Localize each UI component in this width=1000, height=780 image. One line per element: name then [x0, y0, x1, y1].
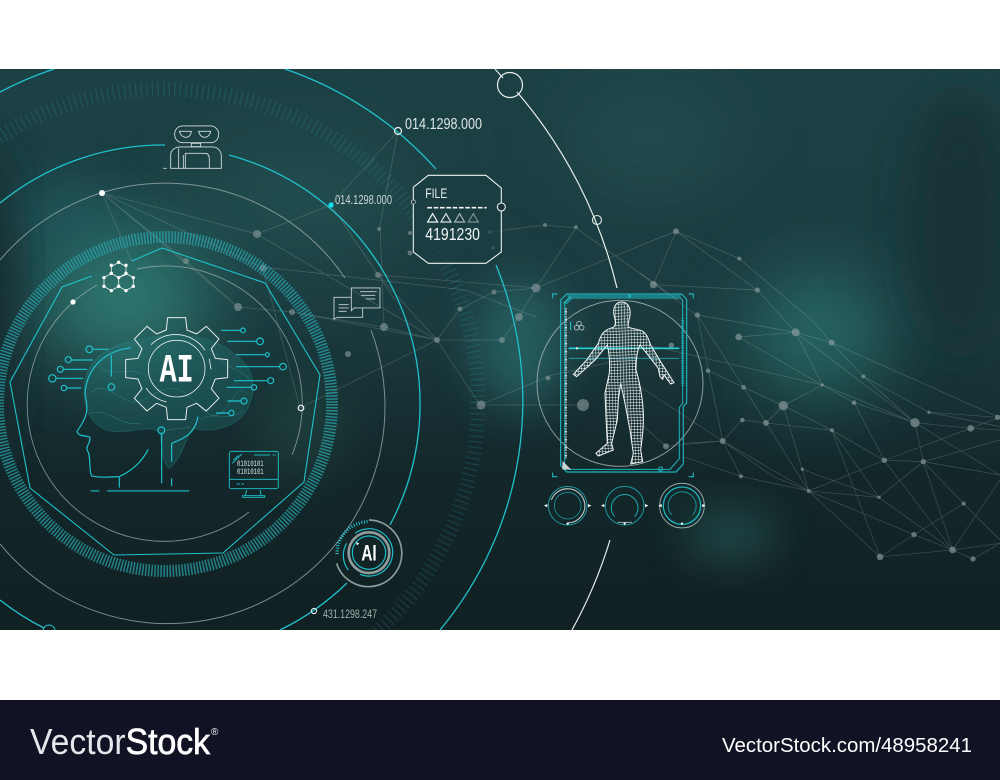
network: right mesh	[640, 228, 1000, 562]
grey orbit arcs	[0, 183, 385, 624]
label: coordinates middle: 014.1298.000	[335, 193, 392, 207]
AI badge: AI	[361, 541, 377, 566]
scan ruler	[565, 308, 567, 458]
scan frame	[553, 294, 693, 477]
scan circle	[537, 300, 703, 466]
footer logo: VectorStock	[30, 721, 211, 762]
icon: monitor	[229, 451, 278, 497]
icon: robot	[163, 126, 221, 168]
gear label: AI	[160, 350, 194, 395]
label: coordinates top: 014.1298.000	[405, 116, 482, 133]
icon: monitor: 01010101	[237, 468, 264, 477]
circuit lines	[49, 328, 286, 416]
inner thin arcs	[27, 266, 302, 541]
scan marker	[576, 347, 578, 349]
wireframe body	[573, 302, 674, 464]
AI badge	[337, 520, 402, 587]
head outline	[77, 348, 198, 491]
background glow	[0, 69, 1000, 630]
tick ring around brain	[0, 237, 332, 571]
cyan orbit r358 arcs	[0, 69, 523, 630]
icon: small molecule	[574, 321, 584, 330]
brain, head and gear illustration	[49, 318, 286, 491]
panel: main HUD scene	[0, 69, 1000, 630]
file number: 4191230	[425, 224, 480, 244]
icon: monitor: 01010101	[237, 460, 264, 469]
label: coordinates bottom: 431.1298.247	[323, 607, 377, 621]
footer registered mark: ®	[211, 727, 219, 738]
panel: file card	[411, 175, 505, 263]
orbit node markers	[43, 72, 602, 637]
faint hatched ring	[0, 82, 486, 630]
cyan orbit r258 arcs	[0, 145, 420, 630]
file triangles	[428, 214, 478, 222]
network: left mesh	[102, 131, 678, 411]
panel: body scan	[537, 294, 706, 528]
gear	[126, 318, 228, 420]
brain mesh	[84, 335, 253, 468]
icon: chat bubbles	[334, 288, 380, 319]
ring gauge middle	[601, 486, 648, 525]
icon: molecule	[102, 261, 135, 292]
ring gauge left	[544, 486, 591, 525]
large white orbit arcs	[495, 69, 617, 630]
octagon frame	[10, 248, 320, 555]
footer url: VectorStock.com/48958241	[722, 735, 972, 757]
file heading: FILE	[425, 185, 447, 201]
footer bar	[0, 700, 1000, 780]
ring gauge right	[658, 483, 706, 528]
